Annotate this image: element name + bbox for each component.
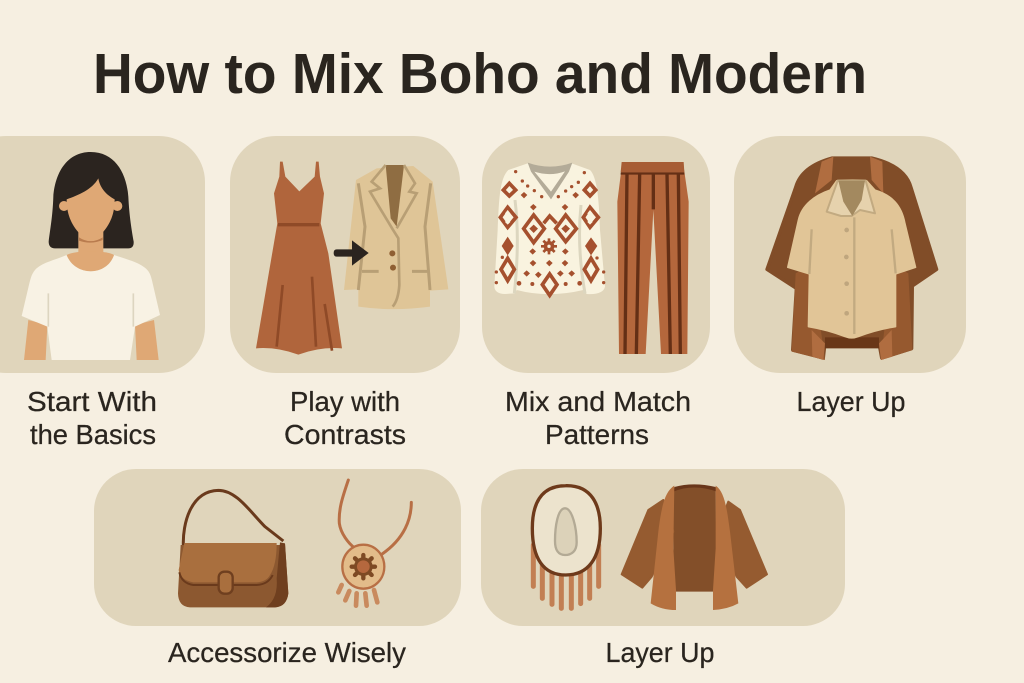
icon: woman in white t-shirt (22, 152, 160, 360)
label: start with the basics: Start With (27, 386, 157, 417)
panel: layer up (734, 136, 966, 373)
icon: open-front jacket (622, 484, 767, 610)
icon: fringed hat (532, 486, 600, 608)
icon: beaded necklace with fringe (338, 480, 411, 606)
panel: play with contrasts (230, 136, 460, 373)
icon: brown handbag (178, 490, 288, 607)
icon: striped trousers (617, 162, 689, 354)
label: patterns: Patterns (545, 419, 649, 450)
panel: layer up second (481, 469, 845, 626)
label: accessorize wisely: Accessorize Wisely (168, 637, 406, 668)
icon: rust dress (256, 162, 342, 355)
label: layer up: Layer Up (796, 386, 906, 417)
panel: start with the basics (0, 136, 205, 373)
label: contrasts: Contrasts (284, 419, 406, 450)
icon: patterned blouse (494, 163, 605, 295)
label: play with: Play with (290, 386, 400, 417)
label: the basics: the Basics (30, 419, 156, 450)
label: mix and match: Mix and Match (505, 386, 691, 417)
panel: accessorize wisely (94, 469, 461, 626)
panel: mix and match patterns (482, 136, 710, 373)
icon: beige blazer (344, 165, 448, 309)
icon: layered shirt and cardigan (767, 157, 937, 360)
title: How to Mix Boho and Modern (93, 42, 867, 106)
icon: arrow (334, 240, 369, 266)
label: layer up second: Layer Up (606, 637, 714, 668)
